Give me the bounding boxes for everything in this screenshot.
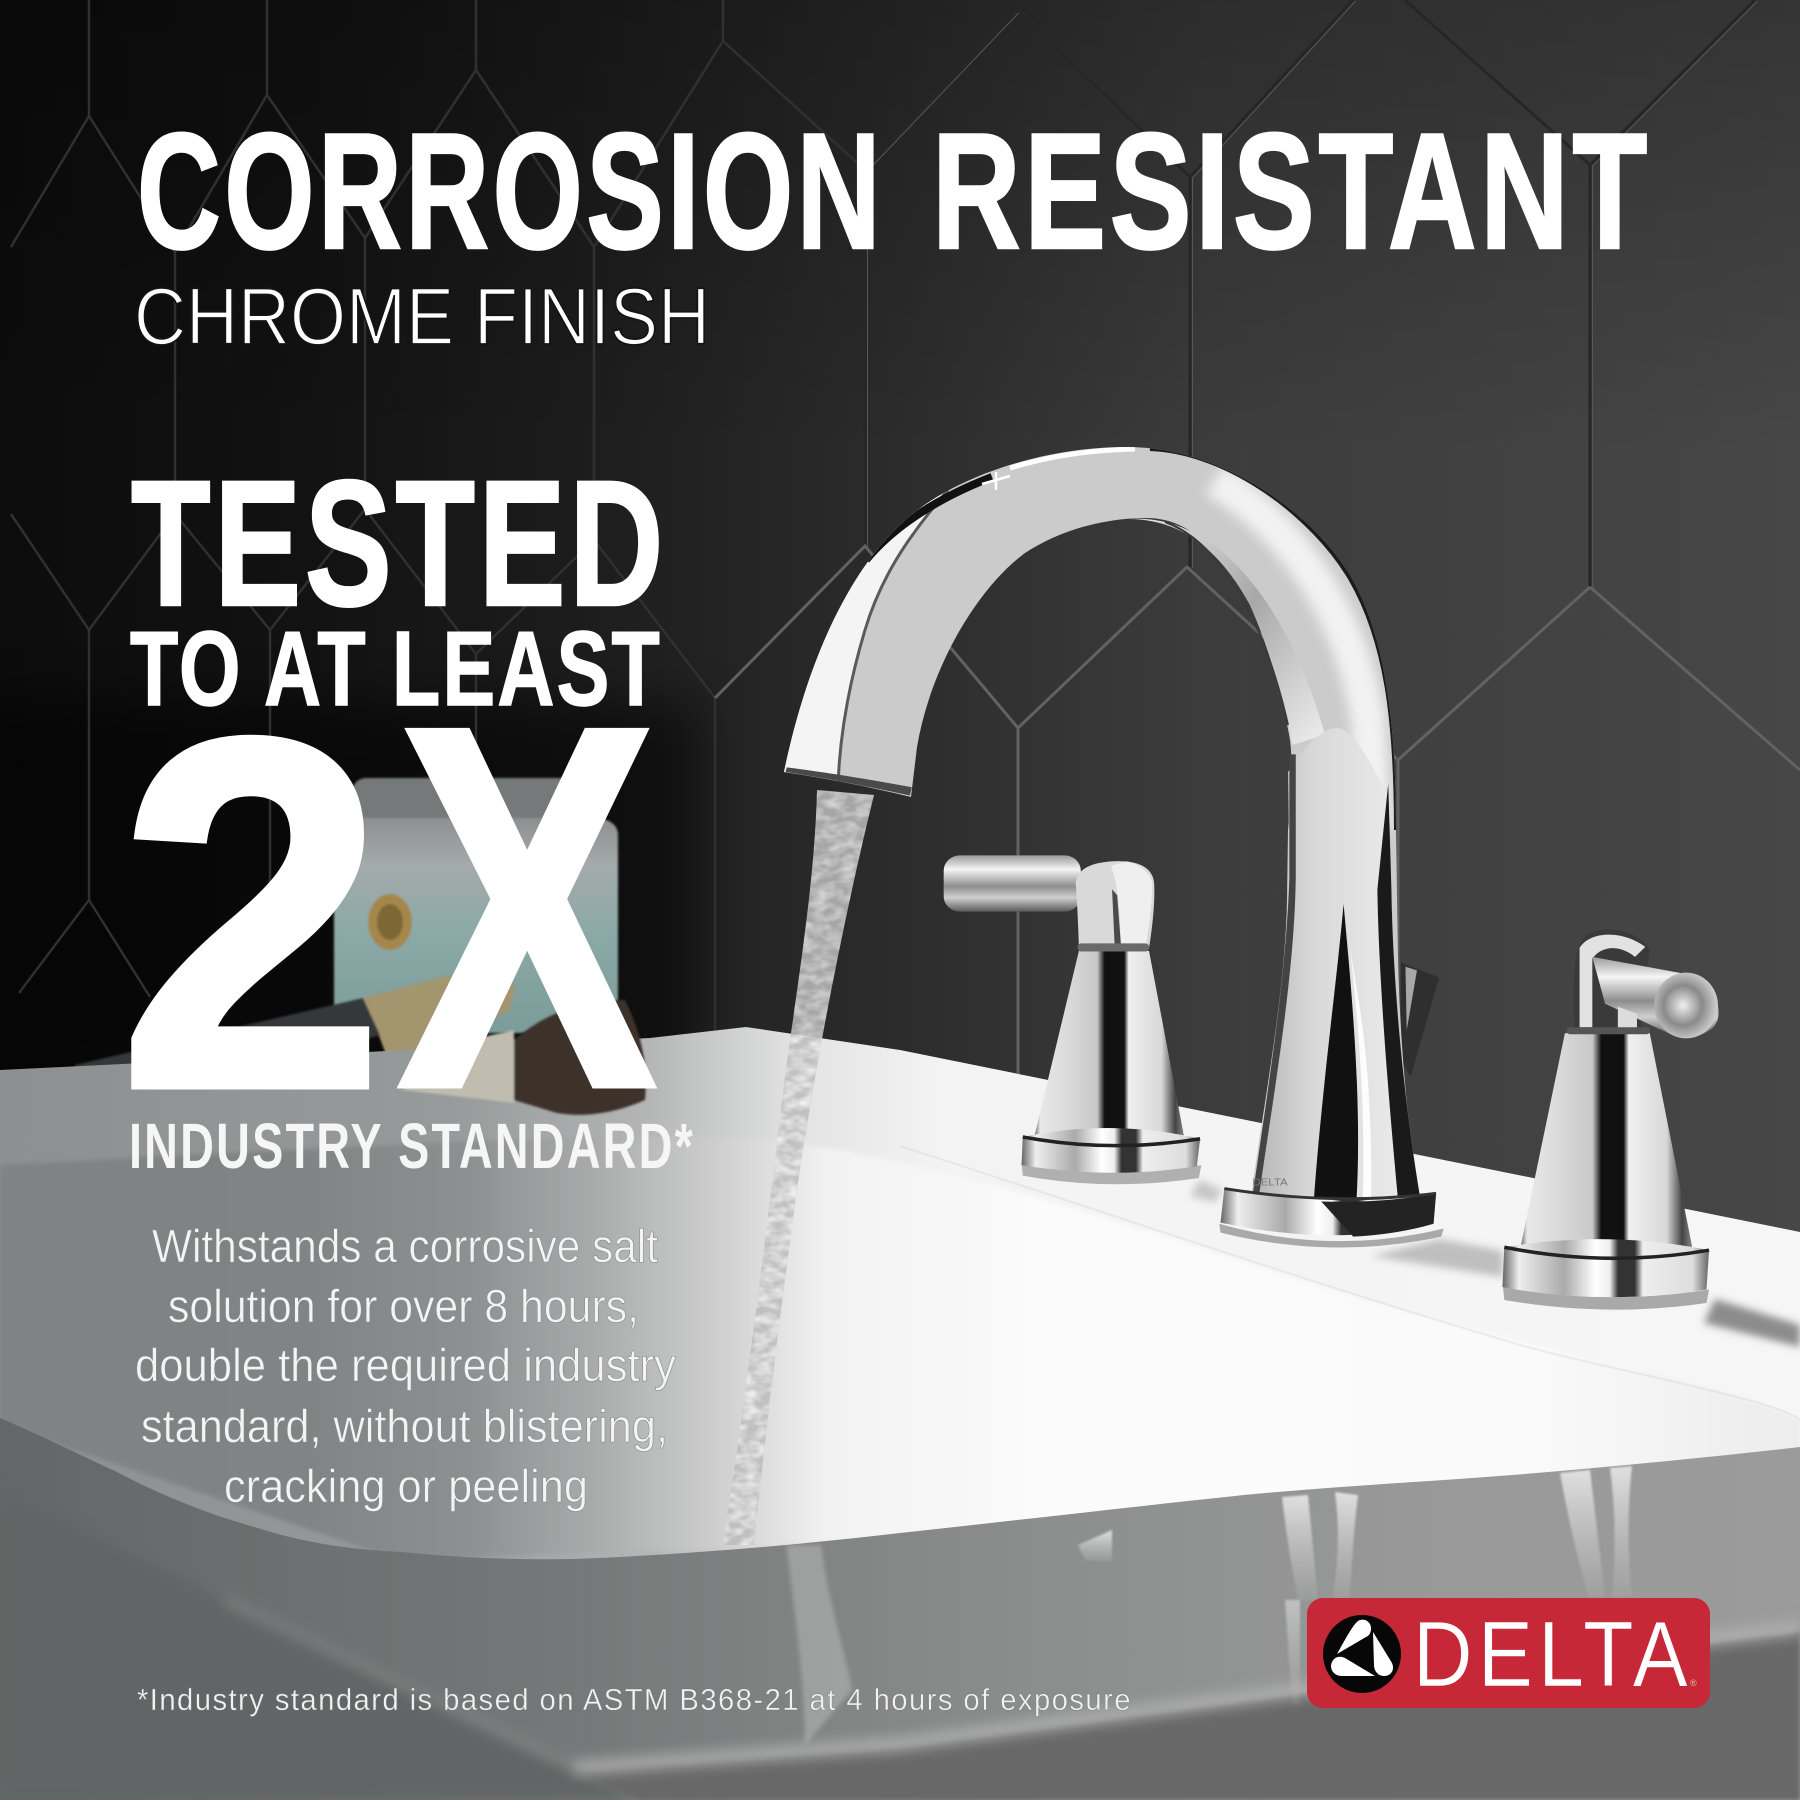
headline: 2X: 2	[118, 635, 385, 1192]
title: CORROSION	[137, 99, 884, 283]
sparkle	[982, 472, 1010, 490]
rim light band	[224, 1600, 1800, 1768]
logo wordmark: DELTA	[1413, 1602, 1693, 1706]
registered mark: ®	[1690, 1678, 1697, 1688]
sink top ledge	[0, 1027, 1800, 1800]
headline: 2X	[118, 620, 658, 1194]
brand mark on base: DELTA	[1252, 1177, 1288, 1189]
spout right white band	[1215, 480, 1374, 830]
water stream	[723, 790, 874, 1745]
body text	[135, 1220, 676, 1512]
inner reflective crescent	[1130, 519, 1325, 745]
footnote: *Industry standard is based on ASTM B368-21 at 4 hours of exposure	[137, 1682, 1132, 1717]
right handle	[1502, 929, 1719, 1310]
faucet	[780, 447, 1719, 1310]
sink basin	[0, 1027, 1800, 1800]
rear lever	[1401, 963, 1439, 1077]
spout left white band	[780, 490, 948, 785]
body text: standard, without blistering,	[141, 1400, 668, 1452]
powder brush	[402, 1000, 646, 1115]
spout arch and stem	[780, 447, 1420, 1205]
water reflection	[786, 1545, 852, 1745]
center base	[1219, 1189, 1444, 1247]
rim dark lower areas	[0, 1488, 640, 1800]
left handle	[944, 855, 1201, 1184]
sink bowl interior	[0, 1137, 1800, 1560]
bowl lip line	[900, 1146, 1800, 1420]
headline: industry standard: INDUSTRY STANDARD*	[129, 1110, 695, 1182]
headline: to at least: TO AT LEAST	[130, 610, 662, 728]
stem overlays	[1252, 728, 1420, 1203]
shadows from faucet on ledge	[1190, 1180, 1800, 1347]
spout outer dark streak	[866, 477, 992, 560]
logo: Delta	[1307, 1598, 1710, 1708]
headline: 2X: X	[398, 620, 658, 1194]
body text: solution for over 8 hours,	[168, 1280, 639, 1332]
spout aerator edge	[786, 767, 912, 795]
headline: tested: TESTED	[131, 443, 667, 643]
chrome reflections on rim	[1078, 1466, 1632, 1705]
body text: cracking or peeling	[224, 1460, 588, 1512]
icon: Delta triangle mark	[1323, 1615, 1401, 1693]
makeup brushes	[75, 975, 515, 1118]
sink front rim	[0, 1418, 1800, 1800]
subtitle: CHROME FINISH	[134, 272, 710, 362]
candle jar	[334, 778, 618, 1033]
body text: double the required industry	[135, 1339, 676, 1391]
background: dark tile wall	[0, 0, 1800, 1300]
body text: Withstands a corrosive salt	[152, 1220, 658, 1272]
